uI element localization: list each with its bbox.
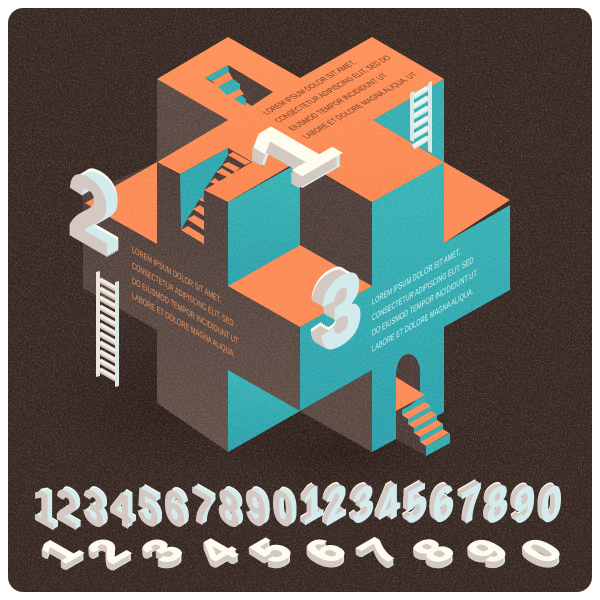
numeral 2: 2 bbox=[68, 148, 109, 278]
ground shadow bbox=[129, 377, 384, 468]
number row: upright right-facing digits: 9 bbox=[514, 472, 535, 536]
text block: left wall: CONSECTETUR ADIPISCING ELIT, SED bbox=[132, 260, 234, 329]
number row: upright left-facing digits: 4 bbox=[110, 476, 131, 540]
number row: upright right-facing digits: 1 bbox=[303, 472, 324, 536]
ladder: right bbox=[410, 81, 432, 153]
number row: flat digits: 8 bbox=[400, 531, 466, 570]
orange left triangle bbox=[85, 162, 157, 244]
number row: flat digits: 7 bbox=[346, 531, 412, 570]
number row: upright left-facing digits: 9 bbox=[245, 476, 266, 540]
number row: upright right-facing digits: 6 bbox=[433, 472, 454, 536]
number row: upright right-facing digits: 7 bbox=[461, 472, 482, 536]
number row: upright right-facing digits bbox=[300, 472, 562, 536]
arch doorway bbox=[396, 354, 420, 420]
brown rear column bbox=[300, 162, 372, 286]
number row: upright left-facing digits: 5 bbox=[137, 476, 158, 540]
number row: flat digits: 0 bbox=[508, 531, 574, 570]
brown left wall bbox=[83, 162, 300, 452]
number row: upright right-facing digits: 4 bbox=[379, 472, 400, 536]
number row: upright left-facing digits: 2 bbox=[56, 476, 77, 540]
numeral 3: 3 bbox=[321, 246, 362, 376]
text block: right wall: LOREM IPSUM DOLOR SIT AMET, bbox=[372, 246, 460, 307]
text block: right wall: LABORE ET DOLORE MAGNA ALIQUA. bbox=[372, 285, 473, 354]
arch staircase bbox=[396, 377, 450, 456]
number row: upright right-facing digits: 2 bbox=[326, 472, 347, 536]
number row: flat digits: 5 bbox=[238, 531, 304, 570]
text block: left wall: LOREM IPSUM DOLOR SIT AMET, bbox=[132, 244, 221, 306]
number row: upright left-facing digits: 1 bbox=[33, 476, 54, 540]
number row: upright right-facing digits: 5 bbox=[406, 472, 427, 536]
text block: left wall: DO EIUSMOD TEMPOR INCIDIDUNT UT bbox=[132, 275, 239, 347]
orange top surface bbox=[157, 37, 444, 202]
number row: upright left-facing digits: 0 bbox=[272, 476, 293, 540]
teal lower triangle bbox=[228, 370, 300, 452]
number row: flat digits bbox=[27, 531, 574, 571]
text block: left wall: LABORE ET DOLORE MAGNA ALIQUA. bbox=[132, 290, 235, 360]
top stairwell bbox=[205, 65, 273, 106]
text block: left wall bbox=[132, 244, 239, 360]
number row: upright right-facing digits: 0 bbox=[541, 472, 562, 536]
teal right wall bbox=[300, 161, 510, 452]
number row: upright left-facing digits: 3 bbox=[83, 476, 104, 540]
brown lower right block bbox=[300, 370, 372, 452]
number row: flat digits: 2 bbox=[75, 531, 141, 570]
text block: right wall: CONSECTETUR ADIPISCING ELIT, SED bbox=[372, 254, 474, 323]
text block: right wall bbox=[372, 246, 477, 354]
brown wall upper left bbox=[157, 79, 228, 162]
number row: flat digits: 4 bbox=[184, 531, 250, 570]
number row: upright left-facing digits: 8 bbox=[218, 476, 239, 540]
number row: upright right-facing digits: 3 bbox=[353, 472, 374, 536]
text block: top surface: LABORE ET DOLORE MAGNA ALIQUA. UT bbox=[300, 71, 420, 140]
number row: upright left-facing digits: 7 bbox=[191, 476, 212, 540]
orange right triangle bbox=[444, 162, 510, 243]
ladder: left bbox=[96, 271, 119, 387]
number row: flat digits: 1 bbox=[27, 531, 93, 570]
number row: flat digits: 6 bbox=[292, 531, 358, 570]
text block: top surface: LOREM IPSUM DOLOR SIT AMET, bbox=[260, 59, 359, 116]
number row: flat digits: 9 bbox=[454, 531, 520, 570]
teal corner behind ladder bbox=[373, 79, 444, 162]
teal inner wall bbox=[228, 162, 300, 287]
numeral 1: 1 bbox=[224, 109, 361, 188]
number row: flat digits: 3 bbox=[129, 531, 195, 570]
orange central diamond bbox=[228, 245, 372, 327]
central stairwell bbox=[180, 148, 252, 244]
number row: upright left-facing digits bbox=[33, 476, 296, 540]
text block: top surface: CONSECTETUR ADIPISCING ELIT, SED DO bbox=[272, 54, 393, 124]
number row: upright right-facing digits: 8 bbox=[487, 472, 508, 536]
number row: upright left-facing digits: 6 bbox=[164, 476, 185, 540]
text block: right wall: DO EIUSMOD TEMPOR INCIDIDUNT UT bbox=[372, 267, 477, 338]
text block: top surface: EIUSMOD TEMPOR INCIDIDUNT UT bbox=[286, 72, 390, 132]
isometric structure bbox=[83, 37, 510, 456]
